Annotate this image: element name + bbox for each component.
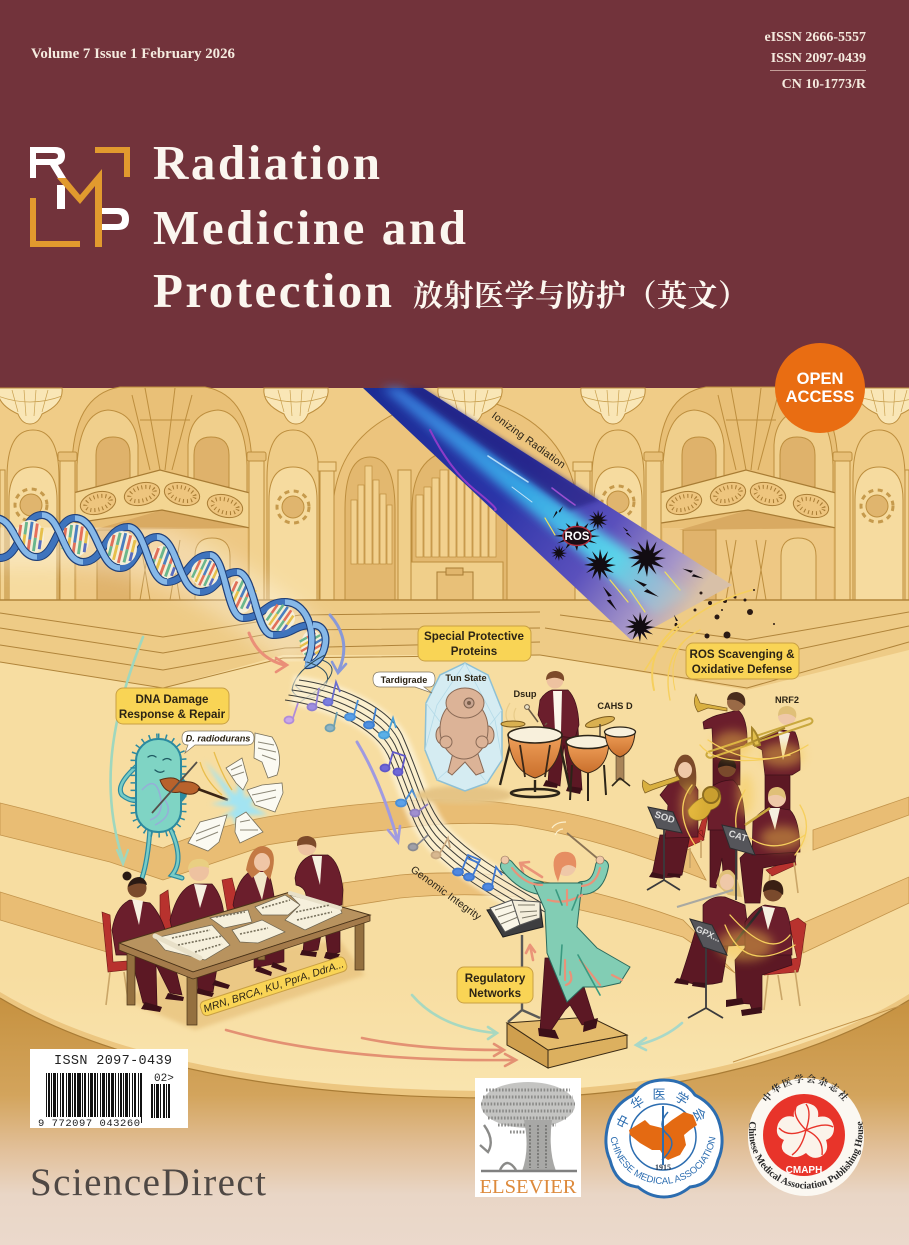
woman with flute [674,870,750,988]
stand: gpx [690,919,727,955]
label: ros scavenging [686,643,799,679]
label: dna damage response [116,688,229,724]
illustrated concert hall background [0,387,909,603]
bottom gradient [0,995,909,1245]
label: special protective proteins [418,626,531,661]
chinese medical association logo: 中华医学会 [617,1088,706,1128]
music stands: CAT [727,828,749,845]
podium [507,1017,627,1068]
cmaph logo: CMAPH [786,1165,822,1176]
cmaph logo [748,1074,864,1196]
rosettes [15,486,893,523]
music stands [647,807,755,1018]
chinese medical association logo: CHINESE MEDICAL ASSOCIATION [610,1136,716,1184]
elsevier logo: ELSEVIER [480,1176,577,1198]
open access badge [775,343,865,433]
front strands [0,515,325,665]
person brown hair [295,836,343,961]
arms [507,866,602,888]
text: genomic integrity: Genomic Integrity [408,864,484,923]
drum large [500,727,570,797]
issn block: eISSN 2666-5557 [764,30,866,45]
antioxidant brass and wind section [642,692,812,1018]
barcode: ISSN 2097-0439 [54,1054,172,1069]
tier band 2 [0,892,107,952]
journal title [153,135,466,318]
chinese medical association logo [604,1078,724,1198]
horn player [688,758,745,888]
text: tun state: Tun State [445,673,487,683]
shatter burst [200,752,268,830]
music stands: SOD [653,809,676,826]
text: cahs d: CAHS D [597,701,633,711]
open access badge: OPEN [797,370,843,388]
text: nrf2: NRF2 [775,695,799,705]
journal title: Radiation [153,135,380,190]
repair team musicians [102,836,370,1030]
table shadow [125,940,365,1030]
trombone player [706,706,812,815]
stand: cat [722,825,755,855]
issn block: CN 10-1773/R [782,77,867,92]
issn block [764,30,867,92]
label: dna damage response: DNA Damage [135,693,209,706]
person red hair [233,846,287,976]
legs and arms [120,765,185,878]
bacterium with violin [120,733,283,878]
tardigrade in crystal [416,663,512,804]
side niches [7,430,905,600]
legs [540,958,595,1032]
music notes [284,682,502,890]
trumpeter [694,692,747,785]
chairs [102,878,240,972]
cmaph logo: 中华医学会杂志社 [762,1074,848,1102]
label: regulatory networks [457,967,533,1003]
stand: sod [648,807,682,833]
music staff ribbon [284,680,552,923]
person seated left [112,872,184,1012]
label: special protective proteins: Proteins [451,645,497,658]
clarinet seated rear [740,787,800,903]
tier band 1 [0,800,706,880]
label: regulatory networks: Regulatory [465,972,526,985]
drummer [538,671,582,794]
chinese title: 放射医学与防护（英文） [413,280,748,313]
music stands: GPX... [694,924,722,944]
columns [0,462,909,600]
ROS burst cluster [550,506,704,642]
debris particles [674,589,775,638]
back strands [0,515,325,665]
barcode: 9 772097 043260 [38,1118,140,1130]
label: d. radiodurans: D. radiodurans [186,734,250,744]
helix dissolving [292,655,332,702]
label: ros scavenging: ROS Scavenging & [689,648,795,661]
central arch and organ [333,395,578,600]
cymbals [501,721,525,727]
stage floor tiers [0,600,909,1040]
icon: tree [480,1082,577,1171]
journal title: Medicine and [153,200,466,255]
chandeliers [0,388,909,424]
icon: china map [629,1112,697,1160]
volume line: Volume 7 Issue 1 February 2026 [31,46,235,62]
text: ionizing radiation: Ionizing Radiation [489,410,568,471]
conductor head [556,856,576,876]
label: regulatory networks: Networks [469,987,521,1000]
lobes and base pairs [16,520,328,660]
icon: pinwheel flower [777,1103,834,1158]
elsevier logo [475,1078,581,1198]
radiation beam [363,388,775,700]
label: special protective proteins: Special Protective [424,630,524,643]
barcode: 02> [154,1073,174,1085]
torn score sheets [188,733,283,851]
green coat [533,883,630,1002]
person blond [170,859,230,997]
label: proteins list: MRN, BRCA, KU, PprA, DdrA... [202,958,346,1015]
face [148,756,171,772]
journal title: Protection [153,263,392,318]
hands and baton [501,856,509,864]
signal pathways on coat [512,868,622,985]
chinese medical association logo: 1915 [655,1163,671,1172]
ROS burst cluster: ROS [565,531,590,543]
text: dsup: Dsup [514,689,537,699]
gold swirl lines [683,740,808,956]
mallets [527,707,547,725]
violin [152,762,228,813]
label: tardigrade: Tardigrade [381,675,427,685]
tardigrade body [436,688,494,775]
music stand and book [487,900,543,1022]
woman with trumpet [642,755,708,879]
scrolls and torn sheets [155,895,342,960]
label: ros scavenging: Oxidative Defense [692,663,793,676]
logo RMP [30,147,130,247]
open access badge: ACCESS [786,388,854,406]
sciencedirect wordmark: ScienceDirect [30,1161,266,1204]
barcode [30,1049,188,1130]
label: tardigrade [373,672,435,693]
journal header panel [0,0,909,388]
drum medium [566,736,610,801]
cmaph logo: Chinese Medical Association Publishing House [749,1122,863,1189]
drum small [604,727,636,786]
repair table [119,892,370,1025]
label: dna damage response: Response & Repair [119,708,226,721]
label: d. radiodurans [182,731,254,753]
conductor on podium [487,822,630,1068]
clarinet seated front [726,880,806,1016]
stage front edge [0,975,909,1098]
timpani and drummer [500,671,636,801]
gold shield swirls [645,590,752,700]
flow arrows [111,615,682,1066]
golden glow [681,731,804,961]
issn block: ISSN 2097-0439 [771,51,866,66]
dna double helix [0,515,332,702]
